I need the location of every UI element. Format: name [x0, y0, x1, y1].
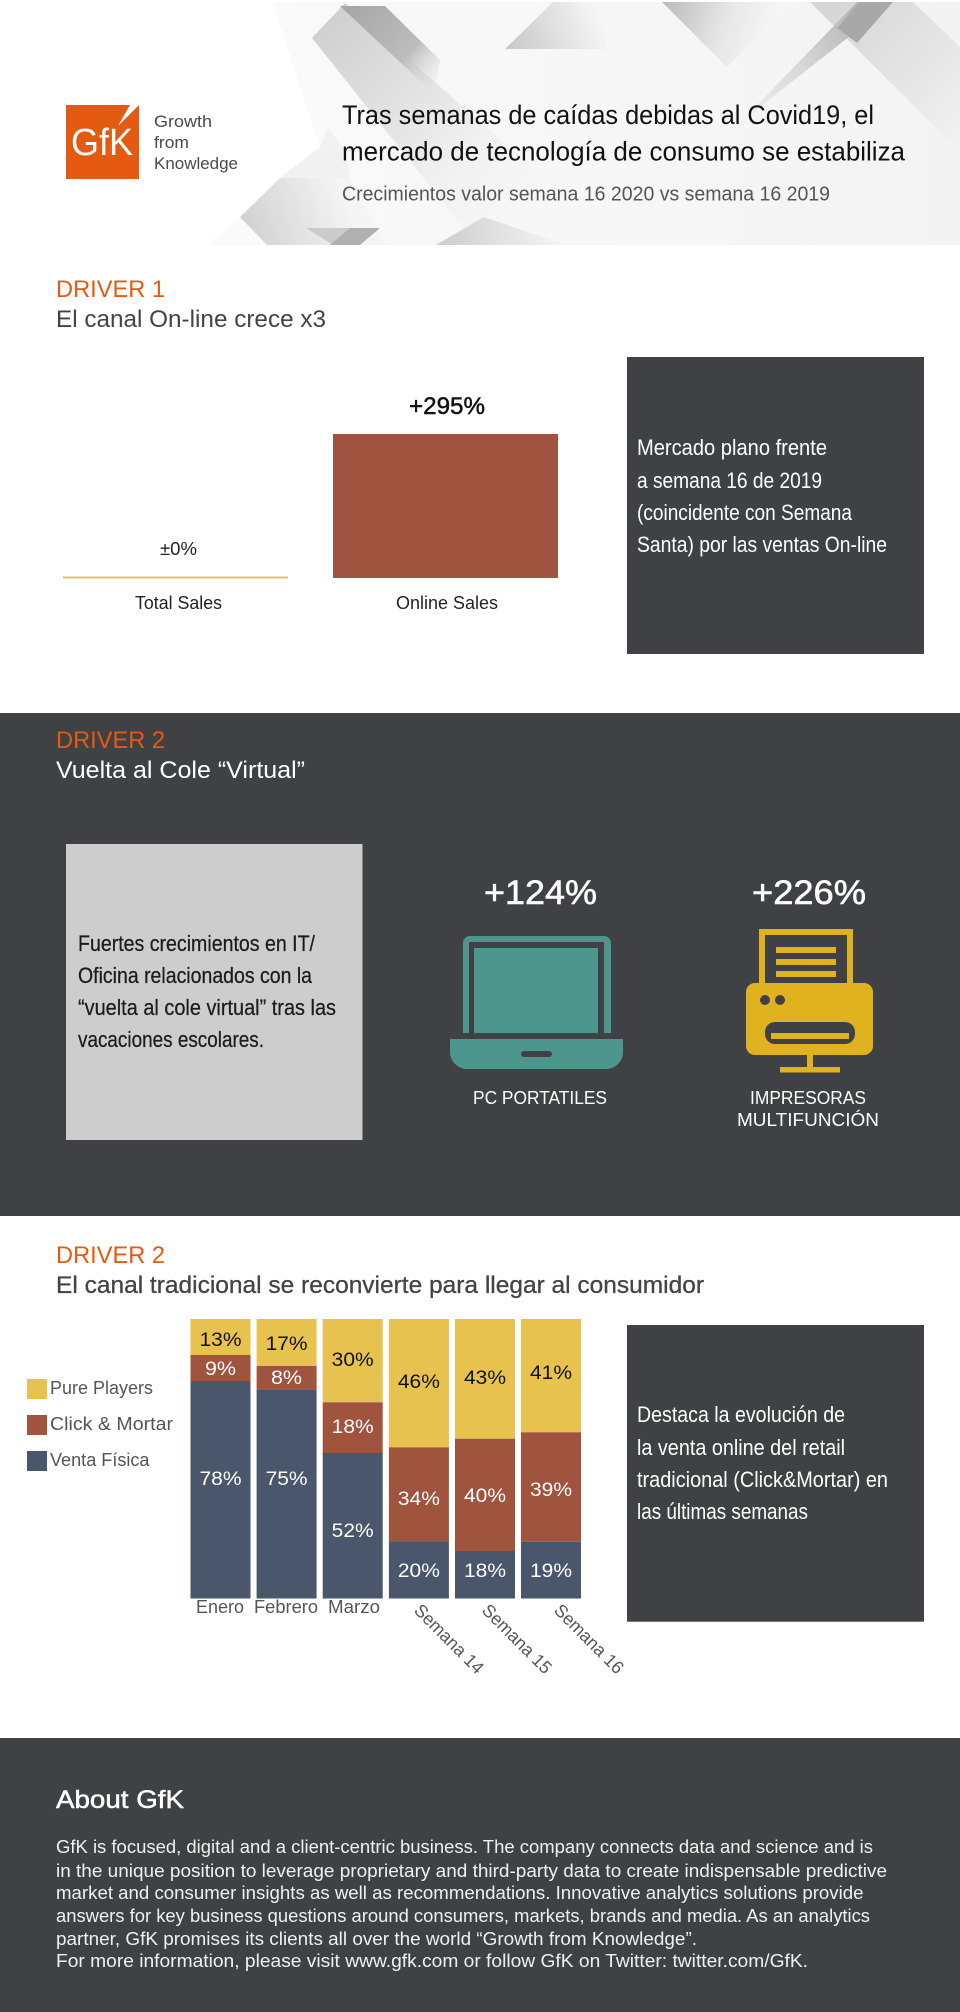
driver 2 heading: DRIVER 2 [56, 727, 165, 754]
x axis labels [196, 1597, 628, 1678]
driver 1 heading: DRIVER 1 [56, 276, 165, 303]
about body text: answers for key business questions around consumers, markets, brands and media. As an analytics [56, 1906, 870, 1926]
logo tagline: from [154, 133, 189, 152]
x axis labels: Marzo [328, 1597, 380, 1617]
subtitle: Crecimientos valor semana 16 2020 vs semana 16 2019 [342, 184, 830, 206]
GfK logo: GfK [71, 122, 133, 164]
stat: PC portatiles: +124% [484, 874, 597, 912]
callout: click and mortar evolution: tradicional (Click&Mortar) en [637, 1467, 888, 1492]
stacked bar chart [190, 1319, 581, 1598]
bar chart: sales growth: Online Sales [396, 593, 498, 613]
callout: strong growth: vacaciones escolares. [78, 1027, 264, 1052]
logo tagline [154, 112, 238, 173]
about body text: GfK is focused, digital and a client-centric business. The company connects data and science and is [56, 1837, 873, 1857]
legend: Pure Players [50, 1378, 153, 1398]
bar: Semana 15: 40% [464, 1486, 506, 1507]
bar chart: sales growth: Total Sales [135, 593, 222, 613]
section: driver 1 [56, 276, 924, 654]
bar: Semana 16: 19% [530, 1561, 572, 1582]
driver 2 heading: DRIVER 2 [56, 1242, 165, 1269]
bar: Febrero: 8% [271, 1368, 302, 1389]
stat: PC portatiles: PC PORTATILES [473, 1088, 607, 1108]
main title [342, 100, 906, 166]
legend: Venta Física [50, 1450, 150, 1470]
legend [27, 1378, 173, 1471]
main title: Tras semanas de caídas debidas al Covid19, el [342, 100, 874, 130]
section: driver 2 virtual school [0, 713, 960, 1216]
bar: Febrero: 17% [266, 1334, 308, 1355]
logo tagline: Knowledge [154, 154, 238, 173]
bar: Semana 16: 39% [530, 1480, 572, 1501]
legend: Click & Mortar [50, 1414, 173, 1434]
callout: click and mortar evolution: la venta online del retail [637, 1435, 845, 1460]
bar: Marzo: 52% [332, 1521, 374, 1542]
about body text: partner, GfK promises its clients all over the world “Growth from Knowledge”. [56, 1929, 697, 1949]
callout: flat market: Santa) por las ventas On-line [637, 532, 887, 557]
x axis labels: Semana 15 [478, 1600, 556, 1678]
x axis labels: Semana 16 [550, 1600, 628, 1678]
callout: flat market: Mercado plano frente [637, 435, 827, 460]
callout: strong growth: Fuertes crecimientos en IT/ [78, 931, 316, 956]
x axis labels: Enero [196, 1597, 244, 1617]
icon: printer [746, 929, 873, 1072]
bar: Enero: 13% [200, 1330, 242, 1351]
bar: Marzo: 18% [332, 1417, 374, 1438]
about body text [56, 1837, 887, 1971]
bar: Semana 15 [455, 1319, 515, 1598]
geometric grey background [208, 2, 960, 245]
x axis labels: Semana 14 [410, 1600, 488, 1678]
callout: flat market: (coincidente con Semana [637, 500, 853, 525]
about body text: For more information, please visit www.gfk.com or follow GfK on Twitter: twitter.com/GfK. [56, 1951, 808, 1971]
bar chart: sales growth: +295% [409, 393, 485, 420]
bar: Semana 14: 34% [398, 1489, 440, 1510]
bar chart: sales growth: ±0% [160, 539, 197, 559]
bar chart: sales growth [63, 393, 558, 613]
about heading: About GfK [56, 1786, 184, 1814]
stat: impresoras multifuncion: MULTIFUNCIÓN [737, 1109, 879, 1130]
bar: Marzo [323, 1319, 383, 1598]
icon: laptop [450, 936, 623, 1069]
about body text: in the unique position to leverage proprietary and third-party data to create indispensable predictive [56, 1861, 887, 1881]
bar: Semana 16 [521, 1319, 581, 1598]
bar: Semana 15: 43% [464, 1368, 506, 1389]
bar: Febrero [257, 1319, 317, 1598]
driver 2 subheading: El canal tradicional se reconvierte para llegar al consumidor [56, 1272, 704, 1299]
bar: Semana 14: 46% [398, 1372, 440, 1393]
bar: Enero: 78% [200, 1469, 242, 1490]
bar: Febrero: 75% [266, 1469, 308, 1490]
GfK logo [66, 105, 139, 179]
callout: click and mortar evolution [627, 1325, 924, 1622]
section: about GfK [0, 1738, 960, 2012]
bar: Semana 14: 20% [398, 1561, 440, 1582]
callout: flat market [627, 357, 924, 654]
bar: Enero [190, 1319, 250, 1598]
main title: mercado de tecnología de consumo se estabiliza [342, 136, 906, 166]
stat: PC portatiles [450, 874, 623, 1108]
callout: flat market: a semana 16 de 2019 [637, 468, 822, 493]
stat: impresoras multifuncion [737, 874, 879, 1130]
callout: strong growth [66, 844, 362, 1140]
section: driver 2 traditional channel [27, 1242, 924, 1678]
bar: Enero: 9% [205, 1359, 236, 1380]
stat: impresoras multifuncion: +226% [752, 874, 866, 912]
bar: Semana 16: 41% [530, 1363, 572, 1384]
callout: click and mortar evolution: las últimas semanas [637, 1499, 808, 1524]
stat: impresoras multifuncion: IMPRESORAS [750, 1088, 866, 1108]
header banner [66, 2, 960, 245]
callout: strong growth: “vuelta al cole virtual” tras las [78, 995, 336, 1020]
about body text: market and consumer insights as well as recommendations. Innovative analytics solutions provide [56, 1883, 864, 1903]
x axis labels: Febrero [254, 1597, 318, 1617]
driver 1 subheading: El canal On-line crece x3 [56, 306, 326, 333]
callout: click and mortar evolution: Destaca la evolución de [637, 1402, 845, 1427]
bar: Marzo: 30% [332, 1350, 374, 1371]
driver 2 subheading: Vuelta al Cole “Virtual” [56, 757, 305, 784]
callout: strong growth: Oficina relacionados con la [78, 963, 313, 988]
bar: Semana 15: 18% [464, 1561, 506, 1582]
logo tagline: Growth [154, 112, 212, 131]
bar: Semana 14 [389, 1319, 449, 1598]
